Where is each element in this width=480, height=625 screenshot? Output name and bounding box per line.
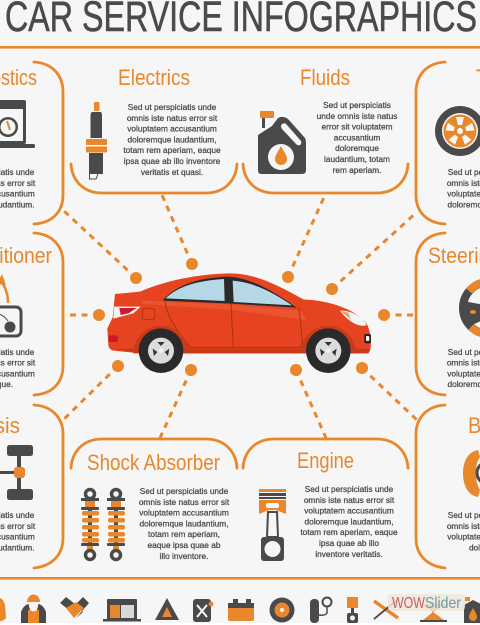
panel: chassis (0, 405, 63, 568)
panel: electrics: ipsa quae ab illo inventore (124, 156, 221, 166)
panel: electrics: veritatis et quasi. (141, 167, 203, 177)
icon: jerrycan (193, 599, 214, 622)
bottom icon row (0, 594, 480, 623)
panel: electrics (71, 65, 237, 193)
tail light (113, 307, 141, 319)
panel: electrics: Sed ut perspiciatis unde (128, 102, 217, 112)
panel: electrics: omnis iste natus error sit (127, 113, 218, 123)
panel: fluids: Fluids (300, 65, 350, 90)
panel: shock absorber: totam rem aperiam, (148, 529, 220, 539)
icon: tire pressure gauge (310, 598, 332, 623)
panel: shock absorber: Sed ut perspiciatis unde (140, 486, 229, 496)
panel: electrics: voluptatem accusantium (127, 124, 217, 134)
panel: fluids: doloremque (335, 143, 379, 153)
icon: piston (259, 489, 286, 561)
rear wheel (139, 328, 183, 373)
icon: laptop (103, 599, 141, 622)
panel: shock absorber: illo inventore. (160, 551, 208, 561)
car illustration (107, 273, 371, 373)
panel: air conditioner (0, 233, 63, 395)
panel: engine: voluptatem accusantium (304, 506, 394, 516)
icon: warning triangle (155, 598, 179, 620)
panel: engine: totam rem aperiam, eaque (300, 527, 398, 537)
icon: tire small (270, 598, 294, 622)
panel: diagnostics (0, 62, 63, 224)
icon: wrenches (374, 600, 398, 619)
icon: oil can small (464, 597, 480, 623)
icon: bag (0, 598, 6, 621)
panel: electrics: doloremque laudantium, (127, 134, 217, 144)
panel: engine: omnis iste natus error sit (304, 495, 395, 505)
panel: shock absorber: eaque ipsa quae ab (148, 540, 221, 550)
panel: fluids: accusantium (334, 132, 380, 142)
panel: shock absorber: voluptatem accusantium (139, 508, 229, 518)
icon: air conditioner (0, 274, 21, 336)
panel: fluids (243, 65, 408, 193)
panel: shock absorber: doloremque laudantium, (139, 518, 229, 528)
panel: engine: ipsa quae ab illo (319, 538, 379, 548)
panel: engine: doloremque laudantium, (304, 516, 394, 526)
icon: chassis (0, 445, 33, 500)
icon: tire (435, 106, 480, 156)
panel: tires (416, 62, 480, 224)
panel: engine: inventore veritatis. (315, 549, 383, 559)
panel: fluids: laudantium, totam (324, 154, 390, 164)
windows (163, 277, 297, 308)
icon: laptop gauge (0, 100, 35, 148)
watermark (388, 594, 465, 612)
panel: shock absorber: Shock Absorber (87, 450, 220, 475)
icon: car jack (420, 604, 447, 622)
icon: brake (463, 450, 480, 497)
front wheel (306, 328, 351, 373)
panel: electrics: Electrics (118, 65, 190, 90)
panel: fluids: error sit voluptatem (321, 122, 393, 132)
panel: fluids: Sed ut perspiciatis (323, 100, 391, 110)
watermark: WOW (392, 595, 426, 612)
wheel arches (133, 326, 189, 353)
panel: shock absorber (71, 439, 237, 561)
icon: piston small (347, 597, 358, 623)
icon: spark plug (86, 102, 107, 179)
panel: shock absorber: omnis iste natus error sit (139, 497, 230, 507)
icon: shock absorbers (81, 490, 125, 560)
car body (107, 273, 371, 353)
panel: engine: Sed ut perspiciatis unde (305, 484, 394, 494)
icon: handshake (60, 597, 89, 618)
panel: fluids: rem aperiam. (333, 165, 381, 175)
connector lines and dots (62, 195, 417, 438)
icon: oil jug (258, 111, 306, 174)
watermark: Slider (425, 595, 462, 612)
panel: engine: Engine (297, 448, 354, 473)
panel: fluids: unde omnis iste natus (317, 111, 397, 121)
panel: brakes (416, 405, 480, 568)
headlight (340, 311, 367, 326)
icon: battery (228, 599, 254, 621)
panel: steering (416, 233, 480, 395)
icon: steering wheel (463, 282, 480, 334)
panel: engine (243, 439, 408, 561)
icon: mechanic (21, 594, 46, 623)
panel: electrics: totam rem aperiam, eaque (123, 145, 221, 155)
